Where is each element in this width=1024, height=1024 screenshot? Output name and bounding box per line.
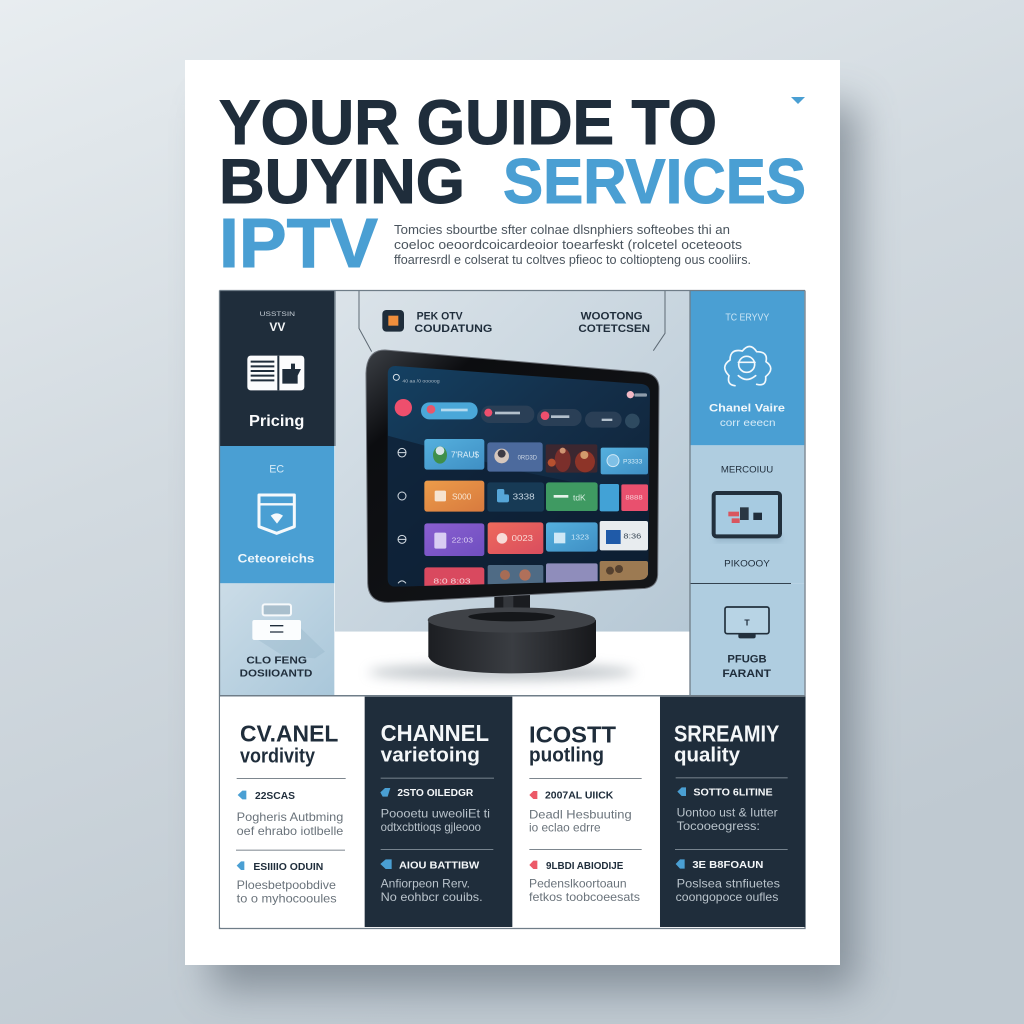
intro text: ffoarresrdl e colserat tu coltves pfieoc to coltiopteng ous cooliirs. — [394, 252, 751, 267]
icon: book with hand — [247, 356, 304, 390]
tile row 1: 0RD3D — [518, 455, 537, 462]
tile row 1 — [424, 439, 648, 474]
card: categories — [220, 446, 334, 583]
icon: orange square badge — [382, 310, 404, 332]
item one: oef ehrabo iotlbelle — [237, 825, 343, 838]
monitor — [366, 350, 659, 602]
item one: 2STO OILEDGR — [397, 788, 474, 799]
item one: Poooetu uweoliEt ti — [381, 808, 490, 821]
column: streaming quality dark: SRREAMIY — [674, 721, 779, 747]
column: streaming quality dark: quality — [674, 744, 740, 767]
poster shadow — [212, 105, 857, 990]
top bar — [393, 374, 647, 398]
tile row 4: 8:0 8:03 — [433, 577, 471, 586]
item two: ESIIIIO ODUIN — [253, 862, 323, 873]
column: streaming quality dark — [660, 697, 805, 927]
item two: 9LBDI ABIODIJE — [546, 861, 623, 872]
card: mercoiuu — [690, 445, 804, 583]
icon: face in cloud — [725, 346, 771, 386]
callout label right: COTETCSEN — [578, 323, 650, 335]
card: channel value: Chanel Vaire — [709, 403, 785, 415]
item one: Tocooeogress: — [677, 820, 760, 833]
column: cost white: ICOSTT — [529, 722, 616, 748]
card: closing dashboard: CLO FENG — [246, 655, 307, 666]
card: plug variant: FARANT — [722, 668, 772, 680]
title word: services: SERVICES — [503, 147, 806, 217]
card: categories: EC — [269, 463, 284, 475]
card: closing dashboard — [220, 583, 334, 696]
callout bracket right — [653, 290, 665, 351]
card: channel value: TC ERYVY — [725, 312, 770, 323]
item one: SOTTO 6LITINE — [693, 788, 773, 799]
column: channel variety white — [220, 697, 365, 927]
card: mercoiuu: MERCOIUU — [721, 464, 773, 474]
item two — [676, 859, 780, 904]
card: pricing: VV — [269, 320, 285, 334]
panel: grid frame — [220, 290, 805, 928]
column: channel variety dark: varietoing — [381, 744, 480, 767]
icon: tv: T — [744, 618, 750, 628]
menu pills — [395, 399, 640, 428]
tile row 3: 8:36 — [623, 531, 641, 540]
item two: Pedenslkoortoaun — [529, 878, 627, 891]
tile row 3: 22:03 — [452, 535, 473, 544]
card: channel value: corr eeecn — [720, 418, 776, 429]
tile row 2: 8888 — [625, 495, 643, 502]
callout label right: WOOTONG — [581, 310, 643, 322]
tile row 3: 0023 — [512, 534, 534, 543]
callout label left: COUDATUNG — [414, 323, 492, 335]
tile row 2: 3338 — [513, 492, 535, 501]
column: channel variety dark — [365, 697, 512, 927]
item one: Deadl Hesbuuting — [529, 808, 632, 821]
item two: Poslsea stnfiuetes — [677, 878, 780, 891]
title — [219, 88, 806, 282]
card: plug variant — [690, 583, 804, 696]
card: pricing — [220, 290, 334, 446]
item two: No eohbcr couibs. — [381, 891, 483, 904]
item two: fetkos toobcoeesats — [529, 891, 640, 904]
stand shadow — [368, 664, 635, 680]
card: plug variant: PFUGB — [727, 654, 767, 666]
poster sheet — [185, 60, 840, 965]
tile row 3 — [424, 521, 648, 556]
tile row 2: tdK — [573, 493, 586, 502]
side menu icons — [398, 448, 406, 583]
column: channel variety white: vordivity — [240, 744, 315, 767]
icon: storage box — [252, 604, 325, 658]
top bar: 40 aa /0 ooooog — [402, 378, 440, 384]
item two: to o myhocooules — [237, 892, 337, 905]
panel: left column — [220, 290, 334, 696]
item one: Uontoo ust & Iutter — [677, 807, 778, 820]
intro text — [394, 222, 751, 267]
screen — [385, 363, 652, 594]
item one — [237, 791, 343, 838]
icon: corner triangle — [791, 97, 805, 104]
column: cost white — [513, 697, 660, 927]
item one: Pogheris Autbming — [237, 811, 343, 824]
icon: shield tag — [259, 495, 294, 533]
item one: io eclao edrre — [529, 822, 601, 835]
tile row 1: 7'RAU$ — [451, 449, 479, 459]
tile row 3: 1323 — [571, 533, 589, 542]
column: cost white: puotling — [529, 744, 604, 767]
item two — [529, 861, 640, 904]
tile row 4 — [424, 561, 648, 586]
title word: buying: BUYING — [219, 147, 465, 217]
title word: iptv: IPTV — [219, 204, 378, 282]
title line: your guide to: YOUR GUIDE TO — [219, 88, 717, 158]
item one — [380, 788, 490, 834]
column: channel variety white: CV.ANEL — [240, 721, 338, 747]
item one — [677, 787, 778, 833]
callout label left — [414, 310, 492, 335]
item two — [380, 859, 483, 904]
card: pricing: Pricing — [249, 413, 304, 430]
item one — [529, 790, 632, 835]
item two: 3E B8FOAUN — [692, 860, 763, 871]
card: channel value — [690, 290, 804, 445]
callout label left: PEK OTV — [417, 310, 463, 322]
column: channel variety dark: CHANNEL — [381, 720, 489, 746]
tile row 2 — [424, 481, 648, 512]
tile row 1: P3333 — [623, 459, 643, 466]
item two: Ploesbetpoobdive — [237, 879, 336, 892]
item one: 2007AL UIICK — [545, 790, 614, 801]
intro text: coeloc oeoordcoicardeoior toearfeskt (rolcetel oceteoots — [394, 237, 743, 252]
panel: centre device — [335, 290, 690, 695]
stand — [428, 595, 596, 673]
item two: Anfiorpeon Rerv. — [381, 878, 470, 891]
item one: 22SCAS — [255, 791, 295, 802]
icon: small monitor — [714, 493, 782, 542]
card: categories: Ceteoreichs — [238, 551, 315, 565]
card: mercoiuu: PIKOOOY — [724, 559, 771, 569]
card: closing dashboard: DOSIIOANTD — [240, 669, 313, 680]
tile row 2: S000 — [452, 492, 472, 501]
callout label right — [578, 310, 650, 335]
item two: coongopoce oufles — [676, 891, 778, 904]
item two: AIOU BATTIBW — [399, 860, 480, 871]
intro text: Tomcies sbourtbe sfter colnae dlsnphiers softeobes thi an — [394, 222, 730, 237]
panel divider — [220, 695, 805, 696]
card: pricing: USSTSIN — [260, 311, 296, 318]
item two — [237, 861, 337, 905]
item one: odtxcbttioqs gjleooo — [381, 821, 481, 834]
panel: right column — [690, 290, 804, 696]
callout bracket left — [359, 290, 372, 352]
